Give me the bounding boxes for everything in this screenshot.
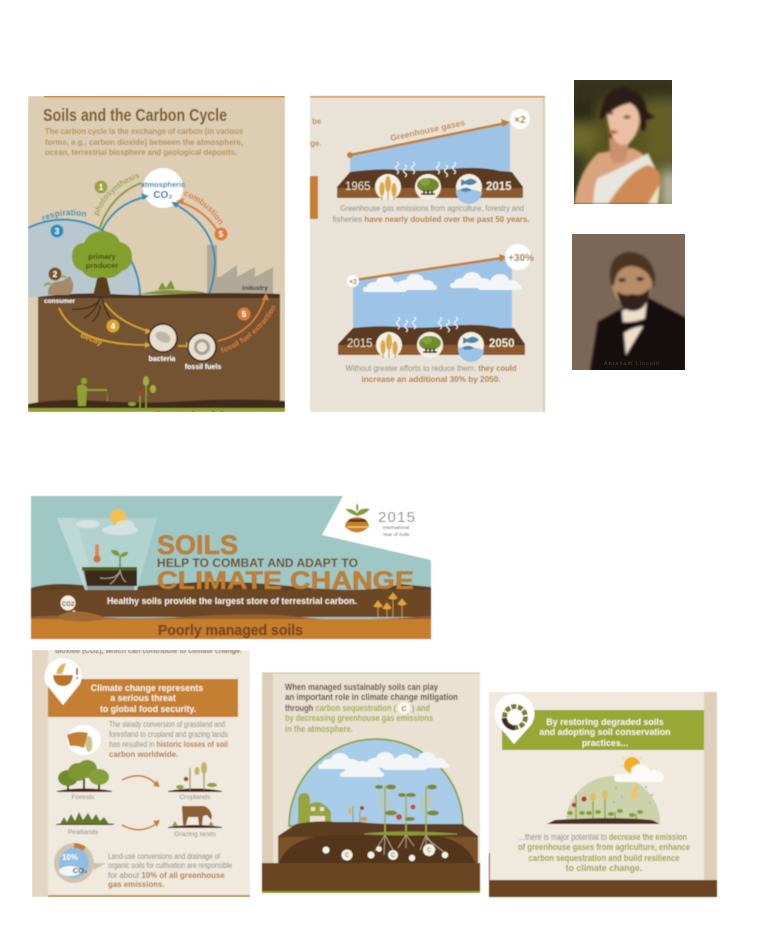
panel: restoring degraded soils xyxy=(489,692,717,897)
soil band xyxy=(31,590,431,617)
decay arrowheads xyxy=(145,328,192,348)
painting signature: Abraham Lincoln xyxy=(604,361,660,367)
connector bacteria to fossil fuels xyxy=(178,345,188,347)
soil block xyxy=(38,297,280,408)
cropped text fragments: ge. xyxy=(310,139,322,148)
step 1 badge: 1 xyxy=(99,183,104,192)
header text: a serious threat xyxy=(110,693,176,703)
tall plants xyxy=(385,786,426,832)
panel: sustainable soil management xyxy=(262,672,480,893)
photo: abraham lincoln portrait xyxy=(572,234,686,372)
increase badge: +30% xyxy=(508,253,534,264)
heading: help to combat and adapt to: HELP TO COMBAT AND ADAPT TO xyxy=(157,558,358,570)
fish icon xyxy=(456,174,482,204)
crop plant xyxy=(128,376,156,408)
ground surface xyxy=(38,293,280,298)
carbon symbols: C xyxy=(345,853,350,859)
closing text: ...there is major potential to decrease the emission xyxy=(519,832,687,842)
carbon symbol in text: C xyxy=(401,704,407,713)
cow and wheat icon xyxy=(67,725,101,755)
logo caption: International xyxy=(383,525,409,531)
step 4 badge: 4 xyxy=(111,322,116,331)
intro text xyxy=(45,126,243,157)
tree roots xyxy=(72,297,110,322)
orange header xyxy=(48,679,238,717)
label: croplands: Croplands xyxy=(180,794,211,801)
text: conversion: carbon worldwide. xyxy=(109,750,178,759)
dark stripe xyxy=(31,614,431,620)
mushroom plants xyxy=(374,593,406,619)
rising arrow xyxy=(347,119,510,158)
caption: additional increase xyxy=(346,364,516,384)
caption: emissions doubled xyxy=(332,204,530,224)
arrow forests to croplands xyxy=(122,776,160,787)
10 percent CO2 gauge xyxy=(54,843,106,883)
terrarium glass xyxy=(57,518,157,590)
sun xyxy=(110,509,126,525)
ground horizon xyxy=(31,582,431,600)
restored plants xyxy=(567,790,643,822)
carbon symbols: C xyxy=(427,848,432,854)
carbon symbol in text xyxy=(398,702,410,714)
bottom line xyxy=(48,895,250,897)
decay arrows xyxy=(59,303,148,345)
rabbit consumer xyxy=(43,275,73,295)
year 2015: 2015 xyxy=(347,338,373,350)
text: conversion: has resulted in historic losses of soil xyxy=(109,740,228,749)
10 percent CO2 gauge: 10% xyxy=(62,853,78,862)
atmospheric CO2 circle: CO₂ xyxy=(153,190,173,201)
ground xyxy=(338,325,525,355)
tree icon xyxy=(415,174,441,200)
header text: and adopting soil conservation xyxy=(539,727,671,737)
cropped left edge line xyxy=(489,853,490,880)
text: conversion: forestland to cropland and grazing lands xyxy=(109,730,228,739)
sky xyxy=(350,122,510,180)
primary producer tree: producer xyxy=(86,261,118,270)
10 percent CO2 gauge: CO₂ xyxy=(73,866,87,875)
text: mitigation: by decreasing greenhouse gas emissions xyxy=(285,713,433,723)
step 2 badge: 2 xyxy=(53,270,58,279)
intro text: The carbon cycle is the exchange of carbon (in various xyxy=(45,126,243,136)
steam xyxy=(396,162,456,177)
closing text: to climate change. xyxy=(566,863,642,873)
year 2050: 2050 xyxy=(489,338,515,350)
croplands illustration xyxy=(168,762,222,792)
panel: soils and the carbon cycle xyxy=(28,96,285,412)
atmospheric CO2 circle: atmospheric xyxy=(141,180,185,189)
step 5 badge top: 5 xyxy=(219,230,224,239)
tree icon xyxy=(417,332,443,358)
fossil fuels circle xyxy=(188,333,216,361)
step 4 badge xyxy=(106,320,120,332)
rising arrow xyxy=(355,254,508,280)
increase badge xyxy=(505,244,534,270)
photo: woman portrait xyxy=(566,72,680,212)
sun xyxy=(620,753,642,773)
bacteria circle xyxy=(149,324,177,352)
base soil band xyxy=(262,863,480,891)
CO2 thought bubble: CO2 xyxy=(62,602,75,608)
label: greenhouse gases: Greenhouse gases xyxy=(389,117,466,143)
bottom soil and grass strip xyxy=(28,400,285,412)
label: peatlands: Peatlands xyxy=(68,829,99,836)
soil: ridge xyxy=(278,821,478,863)
heading: soils: SOILS xyxy=(157,530,238,560)
label: consumer: consumer xyxy=(44,298,76,305)
label: bacteria: bacteria xyxy=(149,356,176,363)
cropped next heading: Sustainable xyxy=(153,408,232,424)
barn and silo xyxy=(298,793,331,824)
text: mitigation: through carbon sequestration ( xyxy=(285,703,396,713)
header text: Climate change represents xyxy=(91,683,203,693)
steam xyxy=(396,317,458,332)
soil: lower lighter layer xyxy=(278,837,478,863)
carbon symbols: C xyxy=(391,853,396,859)
extraction arrow xyxy=(218,293,269,341)
combustion arrow xyxy=(176,198,217,230)
start badge: ×2 xyxy=(349,279,357,286)
logo caption xyxy=(383,525,410,538)
panel: banner soils help combat climate change xyxy=(31,496,431,639)
label: grazing lands: Grazing lands xyxy=(174,831,217,838)
logo corner xyxy=(322,496,431,560)
decomposition arrow to atmosphere xyxy=(170,201,216,294)
cropped orange bar xyxy=(310,176,318,219)
caption: additional increase: increase an additional 30% by 2050. xyxy=(362,375,500,384)
terrarium clouds xyxy=(76,520,138,535)
ground xyxy=(547,818,660,824)
grazing lands illustration xyxy=(168,806,222,828)
photosynthesis arrow xyxy=(99,183,141,230)
text: land use conversions: Land-use conversions and drainage of xyxy=(108,852,221,861)
chart: 1965 to 2015 xyxy=(337,109,530,204)
step 3 badge: 3 xyxy=(55,227,60,236)
panel: food security xyxy=(32,646,250,897)
cropped text fragments: be xyxy=(312,117,322,126)
roots xyxy=(375,835,444,855)
step 3 badge xyxy=(50,224,64,238)
sky xyxy=(353,256,512,332)
arrow peatlands to grazing lands xyxy=(122,820,160,830)
intro text: forms, e.g., carbon dioxide) between the atmosphere, xyxy=(45,137,243,147)
eroded soil mound xyxy=(58,612,106,622)
respiration sky dome xyxy=(28,220,140,297)
CO2 thought bubble xyxy=(60,596,76,614)
text: land use conversions: organic soils for cultivation are responsible xyxy=(108,861,233,870)
dome xyxy=(566,776,660,823)
chart: 2015 to 2050 xyxy=(338,244,534,362)
forests illustration xyxy=(57,760,112,792)
primary producer tree xyxy=(72,231,132,296)
clouds xyxy=(318,752,449,777)
caption: emissions doubled: Greenhouse gas emissions from agriculture, forestry and xyxy=(340,204,524,213)
closing text: carbon sequestration and build resilience xyxy=(528,853,680,863)
year 1965: 1965 xyxy=(345,181,371,193)
orange band xyxy=(31,619,431,639)
step 2 badge xyxy=(48,268,62,280)
soil: buried dark mound xyxy=(279,835,475,863)
dome sky xyxy=(289,739,463,826)
caption: additional increase: Without greater efforts to reduce them, they could xyxy=(346,364,516,373)
wheat icon xyxy=(376,332,402,358)
carbon circles in soil xyxy=(322,844,448,861)
logo year: 2015 xyxy=(378,509,415,526)
small plants at ground xyxy=(140,280,212,295)
logo caption: Year of Soils xyxy=(383,532,410,538)
header text: By restoring degraded soils xyxy=(546,717,664,727)
ground xyxy=(337,168,523,198)
cropped text line: dioxide (CO2), which can contribute to climate change. xyxy=(55,646,242,655)
atmospheric CO2 circle xyxy=(141,168,185,208)
header text: practices... xyxy=(582,738,628,748)
intro text: ocean, terrestrial biosphere and geological deposits. xyxy=(45,147,237,157)
step 5 badge bottom xyxy=(238,308,250,320)
thermometer xyxy=(93,544,101,563)
text: land use conversions: for about 10% of all greenhouse xyxy=(108,871,225,880)
step 5 badge top xyxy=(214,228,228,240)
caption: emissions doubled: fisheries have nearly doubled over the past 50 years. xyxy=(332,215,530,224)
heading: soils and the carbon cycle: Soils and the Carbon Cycle xyxy=(43,105,227,125)
header text xyxy=(539,717,671,748)
step 1 badge xyxy=(94,180,108,194)
label: poorly managed soils: Poorly managed soils xyxy=(158,623,303,639)
header text xyxy=(91,683,203,714)
start badge xyxy=(347,275,359,287)
heading: climate change: CLIMATE CHANGE xyxy=(157,567,414,595)
marker pin: soil ring xyxy=(495,694,534,744)
primary producer tree: primary xyxy=(88,252,117,261)
small crops in the distance xyxy=(348,806,367,822)
green line xyxy=(262,891,480,893)
label: fossil fuel extraction: fossil fuel extraction xyxy=(220,304,276,354)
text: land use conversions: gas emissions. xyxy=(108,880,165,889)
cloud xyxy=(614,764,664,782)
label: combustion: combustion xyxy=(184,191,223,226)
text: mitigation: an important role in climate change mitigation xyxy=(285,692,458,702)
green header xyxy=(502,710,704,750)
label: industry: industry xyxy=(242,285,268,292)
label: respiration: respiration xyxy=(42,208,87,222)
logo: international year of soils xyxy=(345,503,370,532)
text: conversion xyxy=(109,720,228,759)
wheat icon xyxy=(375,174,401,200)
banner statement: Healthy soils provide the largest store of terrestrial carbon. xyxy=(107,596,357,607)
farmer xyxy=(77,378,108,406)
label: forests: Forests xyxy=(72,794,95,801)
text: land use conversions xyxy=(108,852,233,889)
text: mitigation: in the atmosphere. xyxy=(285,724,353,734)
closing text xyxy=(518,832,690,873)
text: mitigation xyxy=(285,682,458,734)
cropped text fragments xyxy=(310,117,322,148)
label: fossil fuels: fossil fuels xyxy=(185,364,221,371)
lightning and rain xyxy=(613,785,653,804)
peatlands illustration xyxy=(56,812,115,825)
marker pin: food bowl xyxy=(44,658,82,705)
text: mitigation: ) and xyxy=(412,703,430,713)
factory xyxy=(207,245,273,295)
label: photosynthesis: photosynthesis xyxy=(94,173,140,216)
respiration arrow to atmosphere xyxy=(102,193,149,230)
year 2015: 2015 xyxy=(486,181,512,193)
fish icon xyxy=(458,332,484,362)
step 5 badge bottom: 5 xyxy=(242,310,247,319)
header text: to global food security. xyxy=(100,704,196,714)
potted soil xyxy=(82,567,137,590)
base soil band xyxy=(489,880,717,897)
closing text: of greenhouse gases from agriculture, enhance xyxy=(518,842,690,852)
text: conversion: The steady conversion of grassland and xyxy=(109,720,225,729)
panel: greenhouse gases xyxy=(310,96,545,412)
plant leaves and tomatoes xyxy=(375,784,439,821)
carbon symbols xyxy=(345,848,432,859)
multiplier badge: ×2 xyxy=(514,115,526,126)
multiplier badge xyxy=(510,109,530,129)
label: decay: decay xyxy=(79,331,104,348)
clouds xyxy=(363,272,522,292)
ground cover xyxy=(364,832,457,835)
text: mitigation: When managed sustainably soils can play xyxy=(285,682,438,692)
seedling xyxy=(111,550,128,568)
